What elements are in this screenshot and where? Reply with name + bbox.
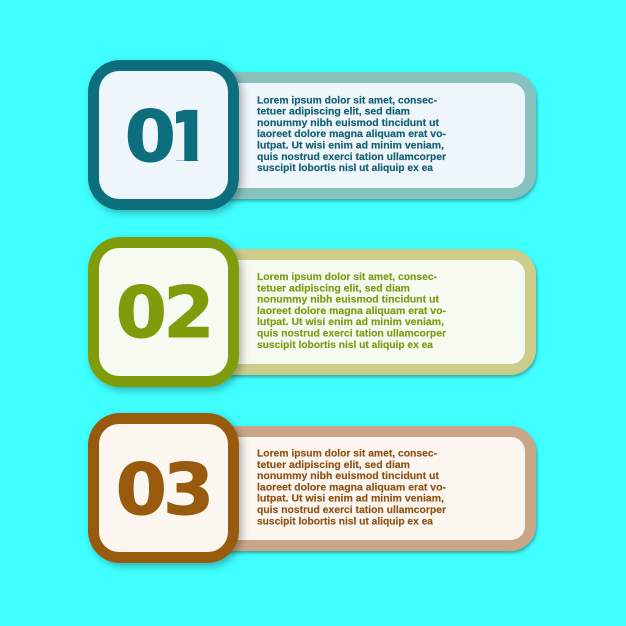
panel: item 03: [88, 413, 536, 563]
text block 02: lutpat. Ut wisi enim ad minim veniam,: [257, 317, 444, 328]
text block 03: suscipit lobortis nisl ut aliquip ex ea: [257, 516, 433, 527]
text bar 03 frame: [200, 426, 536, 551]
number tile 01: [88, 60, 239, 210]
text block 01: suscipit lobortis nisl ut aliquip ex ea: [257, 163, 433, 174]
text block 01: [257, 95, 446, 174]
text block 03: [257, 448, 446, 527]
number 01: 1: [165, 95, 213, 193]
text block 02: laoreet dolore magna aliquam erat vo-: [257, 306, 446, 317]
text block 02: tetuer adipiscing elit, sed diam: [257, 283, 410, 294]
number tile 02: [88, 237, 239, 387]
text block 03: quis nostrud exerci tation ullamcorper: [257, 505, 446, 516]
text bar 02 frame: [200, 249, 536, 375]
panel: item 01: [88, 60, 536, 210]
number tile 03: [88, 413, 239, 563]
panel: item 02: [88, 237, 536, 387]
text block 01: tetuer adipiscing elit, sed diam: [257, 107, 410, 118]
text block 01: nonummy nibh euismod tincidunt ut: [257, 118, 440, 129]
text block 02: [257, 272, 446, 351]
number 01: 0: [125, 96, 176, 178]
text bar 01 inner: [200, 83, 525, 188]
text bar 02 inner: [200, 260, 525, 364]
number tile 02 inner: [99, 248, 228, 376]
number tile 03 inner: [99, 424, 228, 552]
text bar 01 frame: [200, 72, 536, 199]
number 03: 03: [116, 449, 214, 531]
text block 02: Lorem ipsum dolor sit amet, consec-: [257, 272, 437, 283]
number tile 01 inner: [99, 71, 228, 199]
text block 01: Lorem ipsum dolor sit amet, consec-: [257, 95, 437, 106]
text block 01: lutpat. Ut wisi enim ad minim veniam,: [257, 140, 444, 152]
text block 03: laoreet dolore magna aliquam erat vo-: [257, 482, 446, 493]
text block 01: laoreet dolore magna aliquam erat vo-: [257, 129, 446, 140]
text block 03: lutpat. Ut wisi enim ad minim veniam,: [257, 494, 444, 505]
number 01: [128, 108, 199, 162]
text block 02: quis nostrud exerci tation ullamcorper: [257, 328, 446, 340]
text block 02: nonummy nibh euismod tincidunt ut: [257, 295, 440, 306]
text block 03: tetuer adipiscing elit, sed diam: [257, 460, 410, 471]
text block 03: Lorem ipsum dolor sit amet, consec-: [257, 448, 437, 460]
text block 01: quis nostrud exerci tation ullamcorper: [257, 152, 446, 163]
text bar 03 inner: [200, 437, 525, 540]
text block 02: suscipit lobortis nisl ut aliquip ex ea: [257, 340, 433, 351]
text block 03: nonummy nibh euismod tincidunt ut: [257, 471, 440, 482]
number 02: 02: [116, 272, 215, 354]
